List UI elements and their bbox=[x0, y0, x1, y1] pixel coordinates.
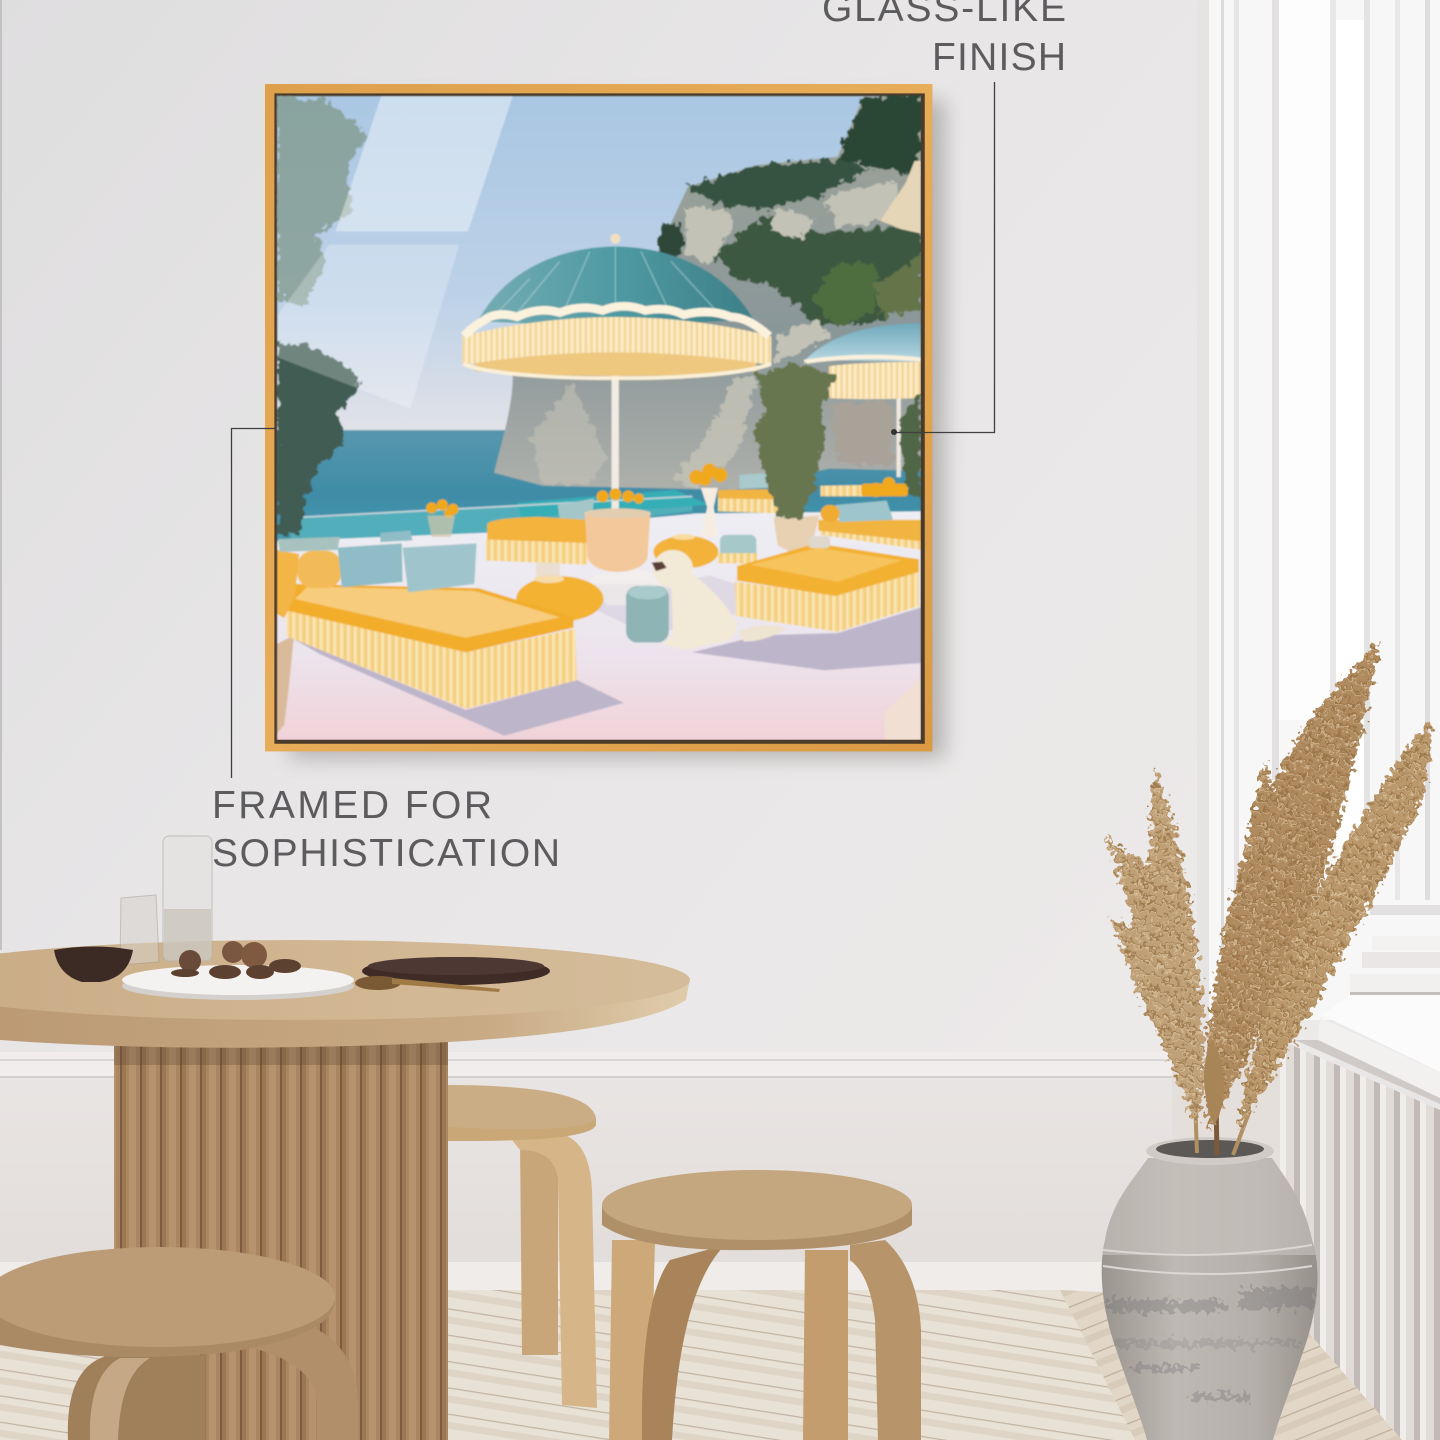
callout: framed for sophistication: SOPHISTICATION bbox=[212, 832, 560, 875]
scalloped trim bbox=[464, 306, 769, 336]
baseboard bbox=[0, 1262, 1110, 1292]
stool seat edge bbox=[602, 1205, 912, 1250]
window frame bbox=[1172, 0, 1440, 1300]
vase body bbox=[1095, 1140, 1325, 1440]
pole bbox=[612, 353, 619, 513]
blue stool bbox=[626, 586, 669, 642]
ottoman right bbox=[653, 534, 757, 568]
second umbrella bbox=[804, 323, 921, 477]
pouf with tea bbox=[516, 563, 603, 622]
callout dot bbox=[891, 429, 897, 435]
main umbrella bbox=[462, 234, 771, 513]
callout: framed for sophistication bbox=[212, 428, 560, 875]
cliff vegetation bbox=[658, 96, 921, 328]
cliff villa bbox=[880, 161, 921, 234]
olive plant bbox=[752, 364, 835, 518]
gold spoons bbox=[355, 976, 500, 992]
bed cushion bbox=[286, 584, 574, 652]
glass balustrade line bbox=[291, 496, 692, 518]
books on window sill bbox=[1350, 936, 1440, 995]
pillows bbox=[278, 531, 477, 592]
bowl bbox=[54, 946, 133, 982]
carafe bbox=[163, 836, 212, 961]
terrace bbox=[277, 511, 921, 740]
plume left bbox=[1105, 768, 1204, 1125]
back beds bbox=[718, 485, 921, 550]
canopy ribs bbox=[499, 247, 715, 312]
table top bbox=[0, 940, 690, 1048]
sky bbox=[277, 96, 921, 434]
pampas plumes bbox=[1105, 640, 1431, 1132]
centre planter bbox=[584, 507, 652, 605]
stool seat bbox=[0, 1247, 335, 1347]
drinking glass bbox=[120, 895, 159, 965]
left tree lower bbox=[277, 340, 359, 537]
terrace shadows bbox=[291, 575, 921, 736]
cliff rock bbox=[494, 96, 921, 490]
floor bbox=[0, 1290, 1402, 1440]
gold frame bbox=[265, 84, 932, 751]
right foreground tree bbox=[900, 392, 921, 501]
main daybed bbox=[277, 550, 577, 709]
left front stool bbox=[0, 1247, 358, 1440]
artwork bbox=[277, 96, 921, 740]
callout: glass-like finish bbox=[822, 0, 1066, 432]
front fringe bbox=[462, 317, 771, 365]
cliff light faces bbox=[530, 180, 897, 488]
wall bbox=[0, 0, 1440, 1060]
vase bbox=[1095, 1100, 1325, 1440]
stool seat bbox=[602, 1170, 912, 1240]
plume right bbox=[1238, 718, 1431, 1132]
bed back rest bbox=[277, 550, 299, 618]
table column bbox=[114, 1035, 448, 1440]
radiator bbox=[1280, 1040, 1440, 1440]
dog bbox=[652, 550, 786, 650]
glass reflection bbox=[278, 96, 513, 409]
umbrella canopy bbox=[478, 246, 753, 328]
left planter bbox=[277, 635, 294, 733]
back fringe bbox=[474, 349, 756, 376]
pampas stems bbox=[1195, 1100, 1250, 1155]
dado moulding bbox=[0, 1052, 1172, 1078]
right front stool bbox=[602, 1170, 921, 1440]
callout: glass-like finish: FINISH bbox=[932, 36, 1066, 79]
infinity pool bbox=[290, 506, 693, 538]
window sill bbox=[1295, 995, 1440, 1104]
dark wooden plate bbox=[362, 957, 550, 985]
olive plant pot bbox=[752, 364, 835, 553]
back pillows and lemons bbox=[426, 463, 908, 537]
plume centre bbox=[1206, 640, 1380, 1132]
back stool bbox=[448, 1085, 597, 1408]
bed fringe bbox=[286, 610, 466, 709]
bolster bbox=[297, 551, 342, 588]
framed painting bbox=[265, 84, 932, 751]
callout: framed for sophistication: FRAMED FOR bbox=[212, 784, 492, 827]
sea bbox=[276, 429, 921, 542]
painting shadow bbox=[290, 100, 945, 758]
right daybed bbox=[735, 536, 919, 632]
lower wall panel bbox=[0, 1070, 1300, 1300]
plume small bbox=[1204, 1040, 1224, 1125]
marble plate bbox=[122, 965, 354, 1000]
vase rim bbox=[1146, 1137, 1274, 1165]
left tree upper bbox=[277, 96, 368, 306]
wall edge strip bbox=[0, 0, 2, 950]
stool seat edge bbox=[0, 1300, 335, 1357]
stool legs bbox=[609, 1240, 655, 1440]
lower right corner block bbox=[885, 678, 921, 740]
centre bed bbox=[486, 517, 588, 565]
stool legs bbox=[68, 1355, 205, 1440]
truffles and shells bbox=[171, 941, 301, 979]
finial bbox=[610, 234, 621, 244]
